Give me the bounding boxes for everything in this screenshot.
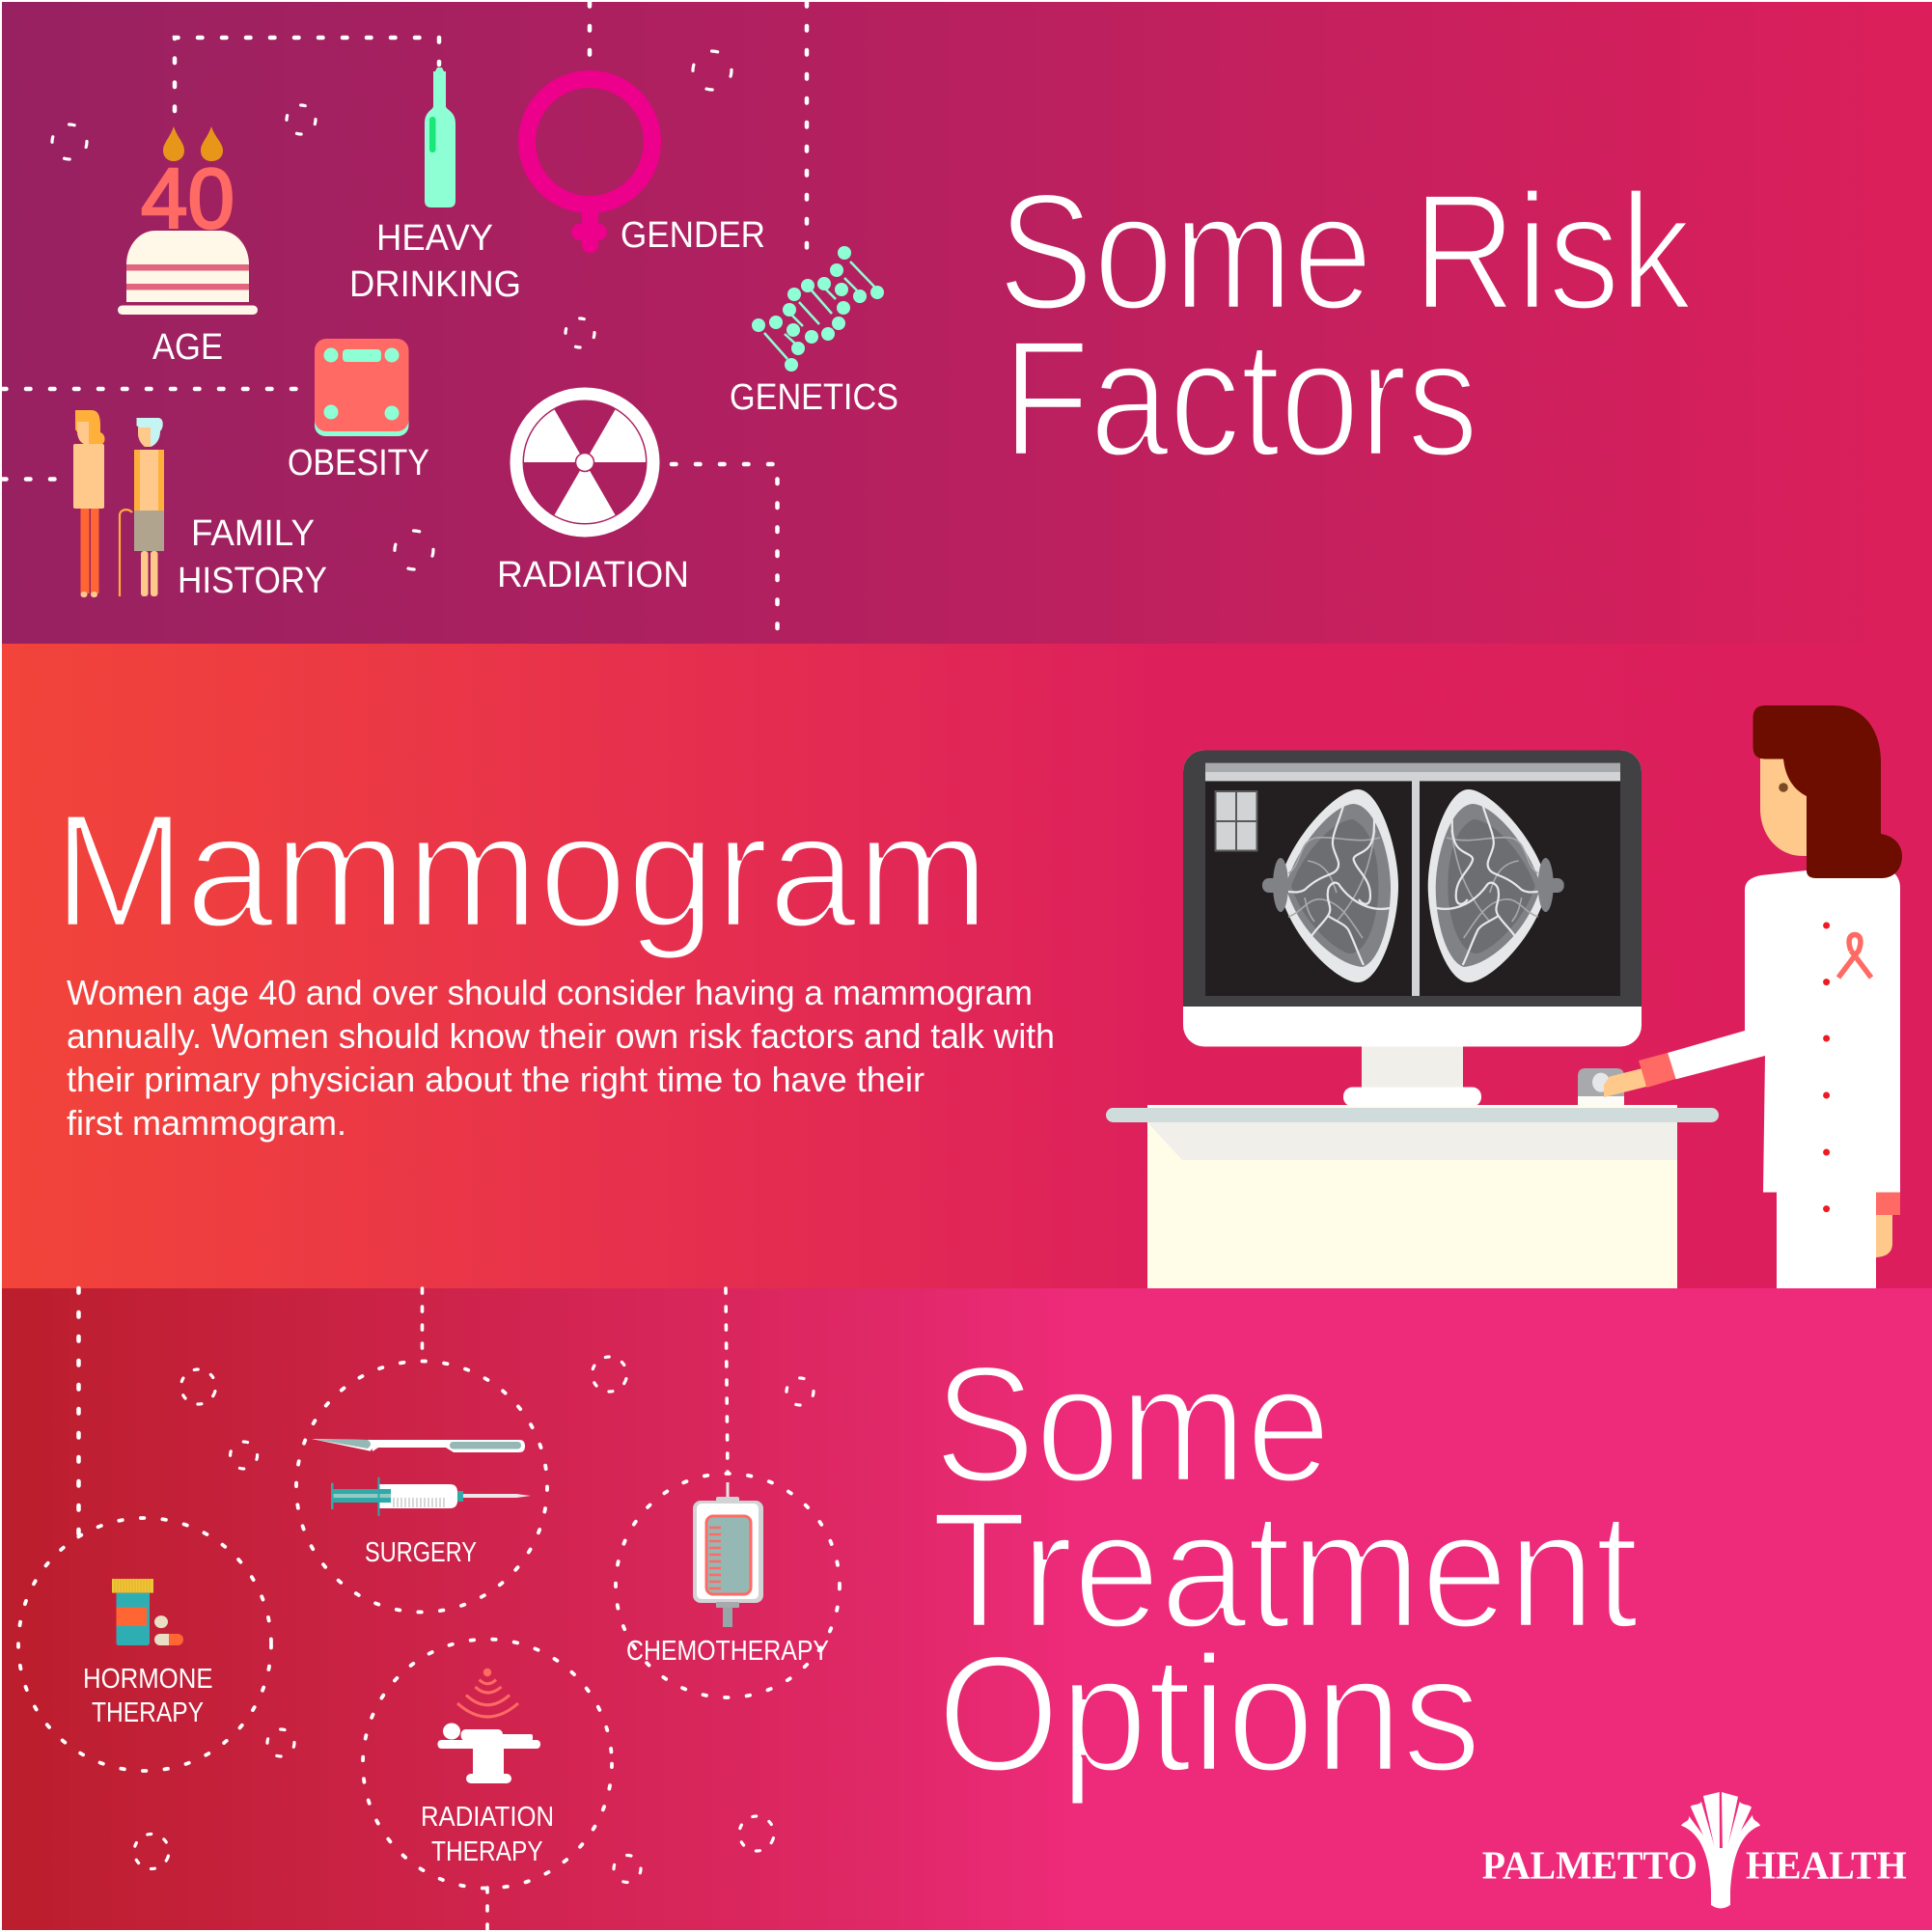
text block: mammogram advice: Women age 40 and over should consider having a mammogram bbox=[67, 973, 1033, 1012]
label: gender: GENDER bbox=[621, 215, 765, 256]
heading: Some Risk Factors: Factors bbox=[1003, 306, 1478, 491]
label: obesity: OBESITY bbox=[288, 443, 429, 483]
text block: mammogram advice: their primary physician about the right time to have their bbox=[67, 1060, 925, 1099]
label: chemotherapy: CHEMOTHERAPY bbox=[626, 1636, 829, 1667]
background band: risk factors bbox=[2, 2, 1932, 644]
dashed connector lines: treatment bbox=[79, 1288, 728, 1930]
background band: treatment options bbox=[2, 1288, 1932, 1930]
small dashed circles: risk factors bbox=[52, 51, 731, 569]
mouse bbox=[1578, 1068, 1624, 1106]
icon: radiation symbol bbox=[516, 394, 653, 531]
icon: birthday cake age 40: 40 bbox=[141, 151, 235, 246]
icon: palmetto tree bbox=[1681, 1792, 1760, 1909]
label: radiation therapy: RADIATION bbox=[421, 1802, 554, 1833]
logo: Palmetto Health: HEALTH bbox=[1746, 1843, 1907, 1888]
icon: radiation waves and table bbox=[438, 1669, 540, 1783]
icon: bottle bbox=[425, 68, 455, 207]
heading: Some Treatment Options bbox=[931, 1332, 1639, 1807]
icon: family, two women bbox=[73, 410, 164, 597]
icon: IV bag bbox=[693, 1482, 763, 1627]
heading: Some Risk Factors: Some Risk bbox=[998, 159, 1693, 345]
label: radiation therapy bbox=[421, 1802, 554, 1867]
panel: surgery bbox=[296, 1361, 547, 1612]
icon: female symbol bbox=[527, 79, 652, 253]
icon: scalpel bbox=[312, 1439, 525, 1452]
icon: pill bottle bbox=[112, 1579, 183, 1645]
label: hormone therapy: HORMONE bbox=[83, 1664, 212, 1695]
text block: mammogram advice: first mammogram. bbox=[67, 1103, 346, 1143]
heading: Some Treatment Options: Options bbox=[937, 1621, 1481, 1807]
heading: Some Treatment Options: Treatment bbox=[931, 1477, 1639, 1663]
label: radiation therapy: THERAPY bbox=[431, 1836, 543, 1867]
text block: mammogram advice: annually. Women should know their own risk factors and talk with bbox=[67, 1016, 1055, 1056]
panel: chemotherapy bbox=[616, 1474, 840, 1697]
label: family history bbox=[178, 513, 327, 601]
small dashed circles: treatment bbox=[129, 1352, 814, 1882]
heading: Some Risk Factors bbox=[998, 159, 1693, 491]
label: age: AGE bbox=[152, 327, 223, 368]
label: radiation: RADIATION bbox=[497, 555, 689, 595]
icon: birthday cake age 40 bbox=[118, 126, 258, 315]
label: heavy drinking: DRINKING bbox=[349, 264, 521, 305]
panel: hormone therapy bbox=[18, 1518, 271, 1771]
desk bbox=[1106, 1105, 1719, 1288]
logo: Palmetto Health bbox=[1482, 1792, 1907, 1909]
icon: pink ribbon bbox=[1838, 934, 1871, 978]
label: family history: HISTORY bbox=[178, 561, 327, 601]
heading: Some Treatment Options: Some bbox=[934, 1332, 1331, 1517]
monitor with mammogram images bbox=[1183, 751, 1642, 1106]
label: surgery: SURGERY bbox=[365, 1537, 477, 1568]
label: family history: FAMILY bbox=[191, 513, 315, 554]
label: heavy drinking bbox=[349, 218, 521, 305]
icon: syringe bbox=[331, 1477, 531, 1516]
logo: Palmetto Health: PALMETTO bbox=[1482, 1843, 1697, 1888]
label: hormone therapy bbox=[83, 1664, 212, 1728]
panel: radiation therapy bbox=[363, 1640, 612, 1889]
label: heavy drinking: HEAVY bbox=[376, 218, 493, 259]
heading: Mammogram: Mammogram bbox=[53, 780, 989, 961]
text block: mammogram advice bbox=[67, 973, 1055, 1143]
label: genetics: GENETICS bbox=[730, 377, 898, 418]
doctor figure bbox=[1604, 705, 1902, 1288]
icon: weighing scale bbox=[315, 339, 409, 436]
background band: mammogram bbox=[2, 644, 1932, 1288]
dashed connector lines: risk factors bbox=[2, 2, 807, 644]
icon: DNA strand bbox=[752, 246, 884, 372]
label: hormone therapy: THERAPY bbox=[92, 1697, 204, 1728]
